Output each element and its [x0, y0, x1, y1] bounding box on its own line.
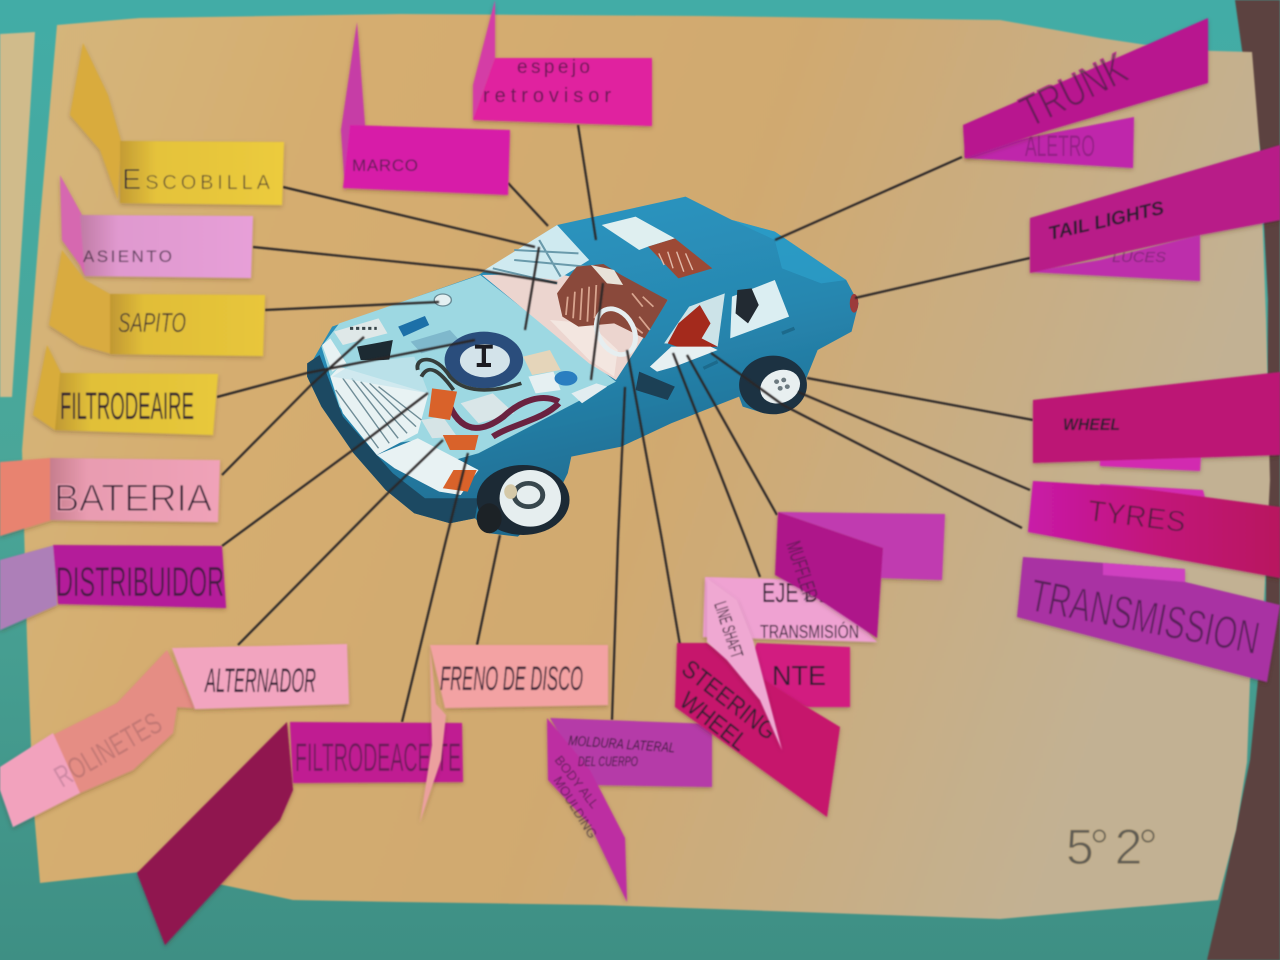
label: Moldura lateral: DEL CUERPO [578, 753, 638, 769]
door mirror [636, 372, 675, 400]
label: Alternador: ALTERNADOR [204, 662, 316, 700]
label: Maletero back: ALETRO [1025, 130, 1095, 163]
label: Tyres: TYRES [1086, 495, 1187, 539]
front side window [664, 293, 725, 347]
cap detail [434, 294, 451, 306]
label: Moldura lateral: BODY ALL [552, 753, 602, 811]
blue washer bottle [398, 316, 429, 337]
label: Steering wheel: STEERING [676, 655, 782, 746]
label: Steering wheel: WHEEL [674, 687, 753, 757]
label: Tail lights: LUCES [1112, 249, 1166, 266]
radiator grille [330, 367, 429, 455]
label: Escobilla: Escobilla [122, 164, 271, 196]
label: Muffler: MUFFLER [781, 538, 822, 603]
headlight block [377, 438, 478, 495]
label: Volante [740, 643, 850, 707]
label: Asiento: ASIENTO [83, 247, 172, 266]
battery [357, 340, 393, 360]
label: Maletero back [965, 117, 1134, 168]
intake block [411, 330, 461, 353]
boxed parts [523, 350, 561, 375]
blue reservoir [555, 371, 577, 386]
label: Volante: NTE [772, 660, 826, 691]
class mark: 5° 2° [1066, 819, 1158, 875]
label: Sapito [49, 250, 265, 356]
label: Escobilla [70, 43, 284, 205]
brown wall edge [1207, 0, 1280, 960]
label: Moldura lateral: MOULDING [550, 774, 600, 841]
label: Tail lights: TAIL LIGHTS [1046, 198, 1166, 245]
label: Espejo retrovisor: retrovisor [483, 85, 611, 107]
label: Marco: MARCO [352, 156, 418, 175]
label: Muffler [775, 512, 945, 638]
door handles [703, 328, 794, 368]
label: Distribuidor: DISTRIBUIDOR [56, 558, 224, 605]
label: Eje de transmision: TRANSMISIÓN [760, 621, 859, 642]
label: Eje de transmision: EJE DE [762, 577, 832, 608]
trunk lid highlight [732, 220, 846, 283]
orange parts [429, 388, 457, 420]
rear cabin window [482, 225, 589, 280]
maroon hoses [450, 398, 559, 437]
label: Freno de disco [420, 645, 608, 822]
label: Rolinetes flap [0, 650, 195, 827]
label: Wheel: WHEEL [1063, 415, 1120, 434]
label: Filtro de aceite [137, 722, 463, 945]
poster photo scene: FILTRODEACEITE [295, 736, 461, 780]
label: Alternador [172, 644, 349, 709]
label: Freno de disco: FRENO DE DISCO [440, 660, 583, 698]
sunroof [602, 217, 675, 250]
label: Tyres [1028, 481, 1280, 578]
engine bay [321, 275, 616, 463]
label: Rolinetes flap: ROLINETES [49, 706, 168, 794]
left headlight [322, 338, 346, 372]
label: Distribuidor [0, 545, 226, 630]
label: Line shaft curl: LINE SHAFT [710, 599, 747, 660]
headrest [591, 265, 623, 285]
indicator [443, 470, 477, 492]
driver figure [668, 305, 718, 348]
steering wheel [589, 303, 643, 360]
engine wiring [417, 360, 521, 390]
leader lines [217, 125, 1033, 722]
car body [307, 197, 859, 537]
label: Steering wheel [674, 643, 840, 817]
front bumper [307, 355, 478, 523]
door sill [650, 347, 718, 372]
rear wheel [739, 356, 807, 414]
label: Bateria: BATERIA [54, 478, 213, 520]
label: Trunk: TRUNK [1013, 44, 1135, 137]
windshield interior [482, 273, 668, 380]
label: Filtro de aire [33, 345, 218, 435]
left paper scrap [0, 32, 35, 397]
label: Sapito: SAPITO [118, 307, 186, 338]
fuse box [334, 318, 387, 345]
seats [557, 264, 668, 338]
label: Filtro de aire: FILTRODEAIRE [60, 386, 194, 428]
label: Moldura lateral: MOLDURA LATERAL [568, 732, 676, 755]
tail light [850, 294, 858, 313]
label: Trunk [963, 18, 1208, 158]
engine block [461, 393, 514, 423]
label: Asiento [60, 175, 253, 278]
label: Line shaft curl [707, 578, 782, 750]
rear side window [730, 280, 789, 338]
rear headrest [736, 288, 759, 323]
front wheel [477, 465, 570, 535]
label: Moldura lateral [547, 718, 712, 902]
label: Wheel [1033, 372, 1280, 471]
label: Eje de transmision [703, 577, 877, 642]
label: Bateria [0, 458, 220, 536]
car illustration [307, 197, 859, 537]
label: Tail lights [1030, 145, 1280, 281]
label: Marco [341, 22, 510, 195]
label: Espejo retrovisor [473, 0, 652, 126]
air filter [445, 332, 523, 388]
label: Espejo retrovisor: espejo [517, 57, 590, 78]
